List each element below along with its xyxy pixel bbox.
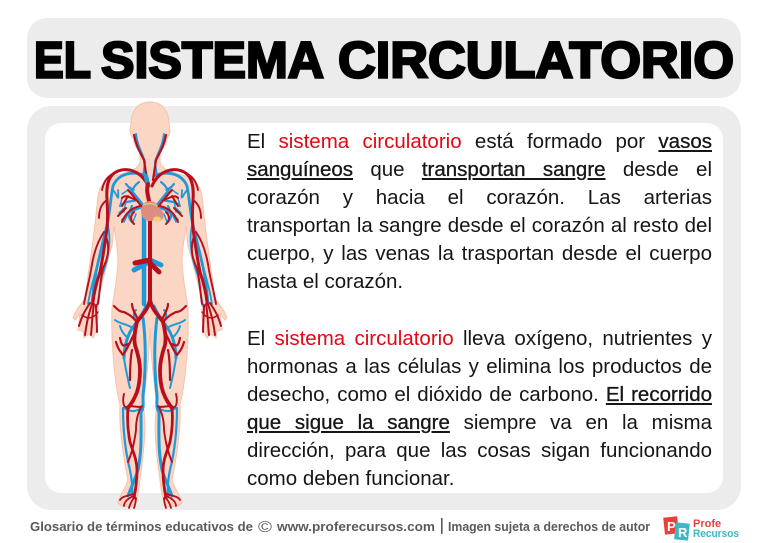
panel: white content area — [45, 123, 723, 493]
vena cava — [144, 176, 148, 304]
title: SISTEMA — [101, 32, 324, 88]
text block: definition paragraph: cuerpo, y las venas la trasportan desde el cuerpo — [247, 242, 712, 265]
aorta — [147, 184, 150, 302]
footer — [30, 516, 739, 541]
title band — [27, 18, 741, 98]
footer text: © — [258, 519, 272, 536]
title: CIRCULATORIO — [338, 32, 734, 88]
footer text: Glosario de términos educativos de — [30, 519, 253, 534]
heart — [141, 201, 164, 222]
logo: Profe Recursos — [663, 516, 739, 541]
text block: function paragraph: hormonas a las células y elimina los productos de — [247, 355, 712, 378]
text block: definition paragraph: El sistema circulatorio está formado por vasos — [247, 130, 712, 153]
footer text: www.proferecursos.com — [276, 519, 435, 534]
vessels of the right side — [150, 134, 221, 508]
text block: definition paragraph: corazón y hacia el corazón. Las arterias — [247, 186, 712, 209]
renal artery — [135, 260, 159, 272]
text block: definition paragraph — [247, 130, 712, 293]
footer text: Imagen sujeta a derechos de autor — [448, 519, 650, 534]
logo: Profe Recursos: Profe — [693, 518, 721, 530]
text block: function paragraph: como deben funcionar. — [247, 467, 454, 490]
title — [34, 32, 734, 88]
text block: function paragraph: El sistema circulatorio lleva oxígeno, nutrientes y — [247, 327, 712, 350]
text block: function paragraph: desecho, como el dióxido de carbono. El recorrido — [247, 383, 712, 406]
logo: Profe Recursos: Recursos — [693, 528, 739, 540]
body silhouette — [73, 102, 227, 506]
central vessels — [134, 176, 161, 304]
text block: definition paragraph: transportan la sangre desde el corazón al resto del — [247, 214, 712, 237]
text block: definition paragraph: sanguíneos que transportan sangre desde el — [247, 158, 712, 181]
vessels of the left side — [79, 134, 150, 508]
text block: function paragraph: que sigue la sangre siempre va en la misma — [247, 411, 712, 434]
logo: Profe Recursos: P — [667, 519, 676, 534]
title: EL — [34, 32, 91, 88]
renal vein — [134, 260, 161, 270]
text block: definition paragraph: hasta el corazón. — [247, 270, 403, 293]
panel: content frame — [27, 106, 741, 510]
text block: function paragraph: dirección, para que las cosas sigan funcionando — [247, 439, 712, 462]
footer text — [30, 518, 650, 536]
text block: function paragraph — [247, 327, 712, 490]
logo: Profe Recursos: R — [678, 525, 688, 540]
